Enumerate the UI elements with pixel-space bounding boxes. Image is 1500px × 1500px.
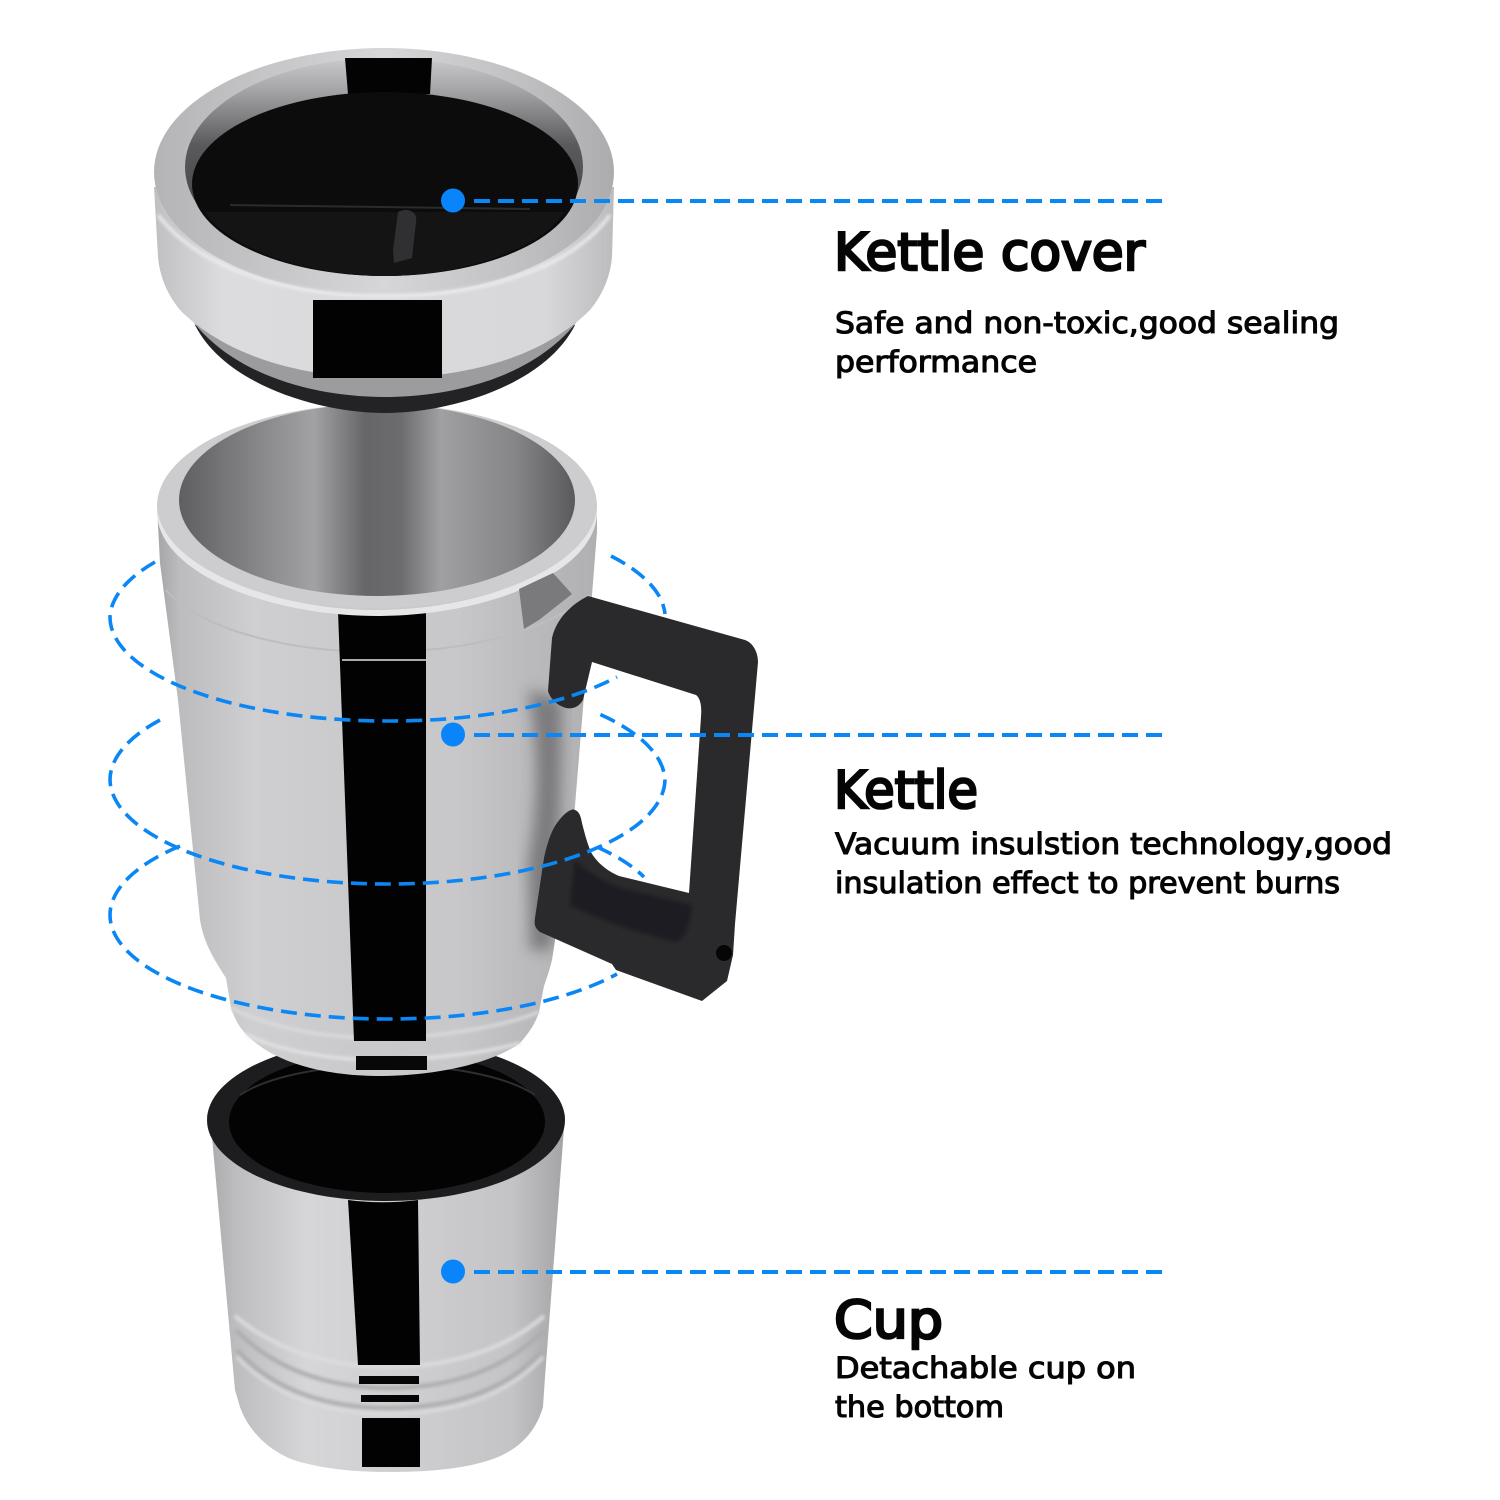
- handle socket: [716, 945, 732, 961]
- cup stripe: [348, 1200, 420, 1365]
- kettle notch: [519, 573, 572, 629]
- cup body: [207, 1115, 565, 1472]
- kettle upper band: [166, 590, 590, 652]
- front stripe: [313, 300, 442, 378]
- tab: [393, 210, 416, 263]
- icon: cup: [207, 1039, 565, 1472]
- top face: [154, 48, 614, 296]
- text: cup description: Detachable cup on: [835, 1351, 1136, 1385]
- inner dark: [192, 92, 578, 276]
- kettle base ring: [246, 1034, 520, 1060]
- kettle rim and interior: [157, 404, 597, 608]
- heading: cup: Cup: [834, 1291, 943, 1351]
- text: kettle cover description: [835, 306, 1339, 379]
- kettle handle: [535, 596, 758, 1001]
- kettle body: [157, 506, 597, 1076]
- heading: kettle cover: Kettle cover: [834, 223, 1146, 283]
- text: kettle cover description: performance: [835, 345, 1037, 379]
- inner wall: [185, 58, 583, 276]
- kettle stripe: [338, 611, 426, 1041]
- dashed rings: [110, 556, 665, 1019]
- text: kettle description: insulation effect to prevent burns: [835, 866, 1340, 900]
- callout: kettle: [441, 722, 1163, 746]
- callout: cup: [441, 1260, 1163, 1284]
- icon: kettle cover: [154, 48, 614, 413]
- skirt: [186, 312, 584, 397]
- heading: kettle: Kettle: [834, 761, 978, 821]
- cup black rim: [207, 1039, 565, 1201]
- text: kettle cover description: Safe and non-toxic,good sealing: [835, 306, 1339, 340]
- text: kettle description: [835, 827, 1392, 900]
- top stripe: [345, 58, 432, 94]
- text: cup description: the bottom: [835, 1390, 1004, 1424]
- handle shadow on body: [528, 690, 562, 950]
- gasket: [195, 325, 575, 413]
- icon: kettle: [157, 404, 758, 1076]
- cup grooves: [235, 1316, 544, 1414]
- text: kettle description: Vacuum insulstion technology,good: [835, 827, 1392, 861]
- text: cup description: [835, 1351, 1136, 1424]
- outer band: [154, 187, 614, 378]
- callout: kettle cover: [441, 188, 1163, 212]
